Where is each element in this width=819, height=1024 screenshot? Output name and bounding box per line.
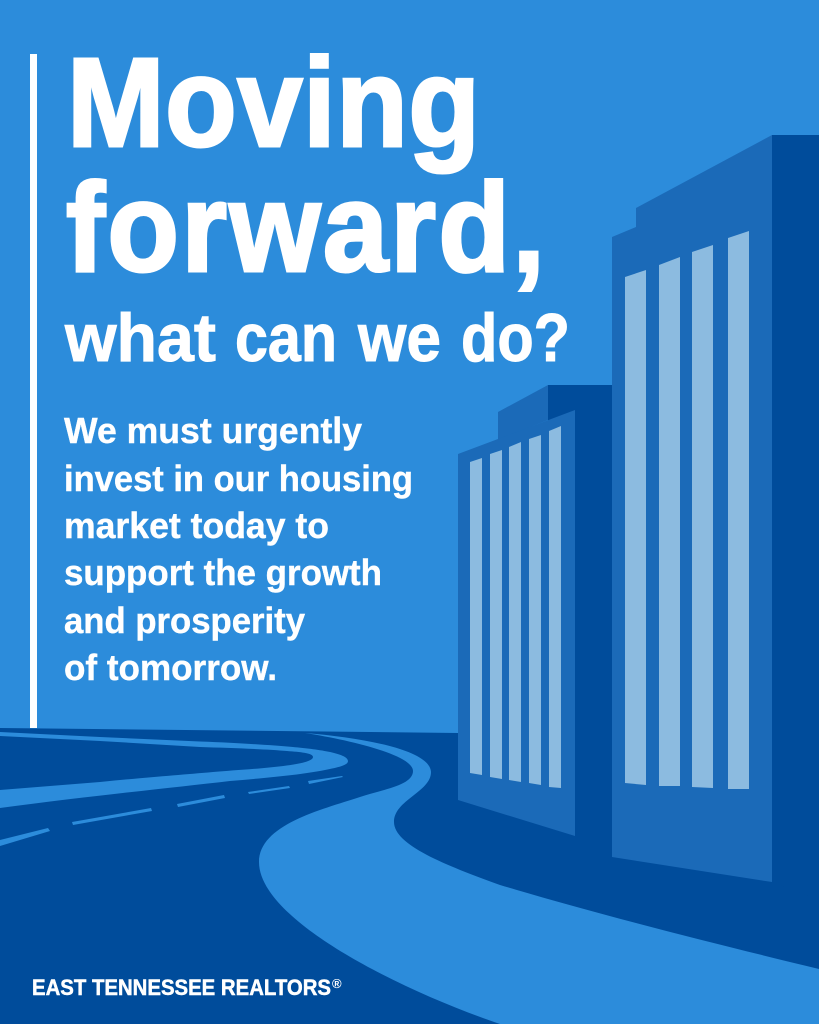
road near sweep [259,733,819,1024]
subtitle: what [64,300,216,376]
vertical accent bar [30,54,37,728]
footer brand: EAST TENNESSEE REALTORS [32,975,331,1000]
large building [612,135,819,900]
body text: We must urgently [64,410,362,451]
small building upper roof [498,385,548,440]
body text: of tomorrow. [64,647,277,688]
small building [458,385,612,860]
title: Moving [67,32,480,173]
body text: support the growth [64,552,382,593]
body text: invest in our housing [64,458,413,499]
body text: market today to [64,505,329,546]
subtitle: can [235,300,337,376]
body text [64,410,413,688]
body text: and prosperity [64,600,305,641]
registered mark: ® [332,976,342,991]
title: forward, [66,157,545,298]
title [66,32,545,298]
large building front [612,135,772,882]
road centre dashes [0,776,343,846]
road far bend [0,732,348,808]
ground [0,728,819,1024]
subtitle [64,300,570,376]
large building windows [625,231,749,789]
subtitle: we [357,300,441,376]
subtitle: do? [461,300,570,376]
small building side [548,385,612,860]
large building side [772,135,819,900]
small building windows [470,426,561,788]
small building front [458,410,575,836]
